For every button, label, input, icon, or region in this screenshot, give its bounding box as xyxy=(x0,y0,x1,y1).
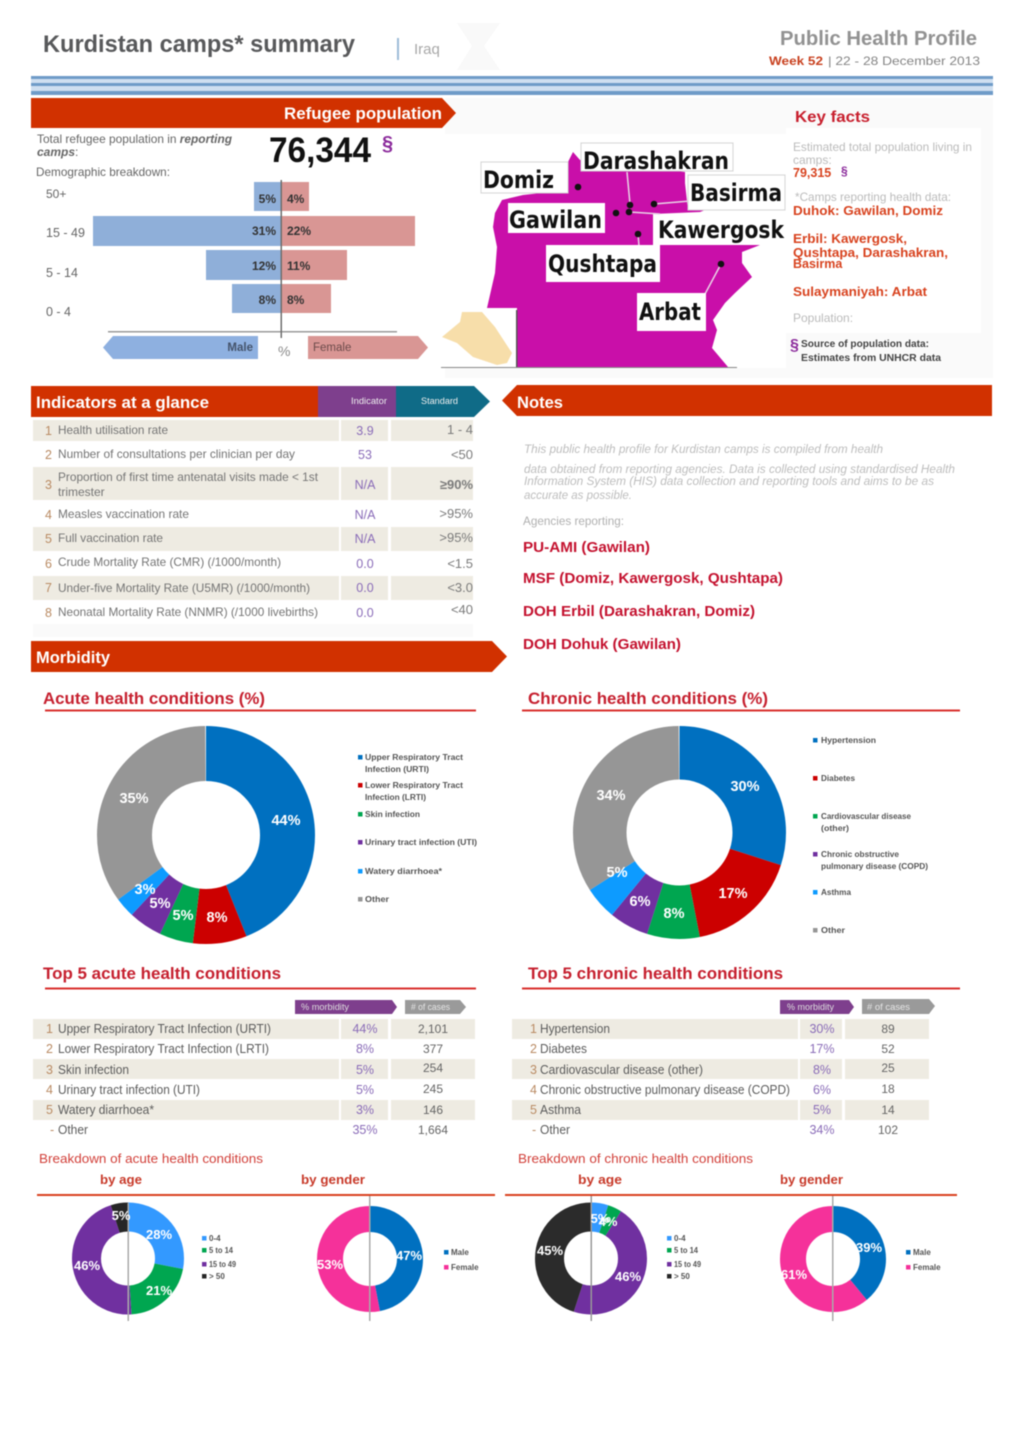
legend: Chronic obstructive xyxy=(821,850,900,859)
indicator row 6: Crude Mortality Rate (CMR) (/1000/month) xyxy=(58,555,281,569)
total population label xyxy=(36,132,233,179)
indicator row 5: N/A xyxy=(355,532,376,546)
legend: Hypertension xyxy=(821,736,876,745)
breakdown headings xyxy=(37,1151,495,1196)
indicators header: Indicator xyxy=(351,396,387,406)
arrow: female legend: Female xyxy=(313,342,351,354)
legend: Upper Respiratory Tract xyxy=(365,753,463,762)
indicator row 8 xyxy=(45,602,473,620)
profile title: Public Health Profile xyxy=(780,28,977,50)
legend: acute by gender xyxy=(444,1248,479,1272)
notes body text: Agencies reporting: xyxy=(523,514,624,528)
label: Kawergosk: Kawergosk xyxy=(658,216,785,244)
source note: § xyxy=(790,337,799,354)
indicator row 3: ≥90% xyxy=(440,477,473,492)
population pyramid chart: 0 - 4 xyxy=(46,305,71,319)
table rows: Skin infection xyxy=(58,1063,129,1077)
table rows: Lower Respiratory Tract Infection (LRTI) xyxy=(58,1042,269,1056)
legend: Infection (LRTI) xyxy=(365,793,426,802)
donut chart xyxy=(124,754,288,916)
banner: morbidity xyxy=(31,641,507,672)
donut value labels: 5% xyxy=(150,896,171,912)
indicator row 8: 8 xyxy=(45,606,52,620)
legend: pulmonary disease (COPD) xyxy=(821,862,928,871)
indicators header xyxy=(31,386,490,417)
indicator row 7: Under-five Mortality Rate (U5MR) (/1000/month) xyxy=(58,581,310,595)
week and dates: | 22 - 28 December 2013 xyxy=(828,54,980,68)
inset map of Iraq xyxy=(441,310,737,368)
faint logo mark xyxy=(457,23,500,70)
notes body text: data obtained from reporting agencies. Data is collected using standardised Health xyxy=(524,464,955,476)
label: Gawilan: Gawilan xyxy=(509,206,602,234)
donut value labels: 5% xyxy=(173,908,194,924)
week and dates xyxy=(769,54,980,68)
panel: indicators at a glance xyxy=(31,386,490,637)
total population label: Demographic breakdown: xyxy=(36,165,170,179)
key facts heading: Key facts xyxy=(795,109,870,126)
population pyramid chart: 5 - 14 xyxy=(46,266,78,280)
table rows: 8% xyxy=(356,1042,374,1056)
indicators header: Standard xyxy=(421,396,458,406)
estimated population xyxy=(793,140,972,180)
table rows: 5% xyxy=(356,1063,374,1077)
indicator row 3: N/A xyxy=(355,478,376,492)
table rows: 102 xyxy=(878,1123,898,1137)
panel: key facts xyxy=(786,109,981,364)
table rows: 2,101 xyxy=(418,1022,448,1036)
legend: acute by age xyxy=(202,1234,236,1281)
panel: breakdown of acute health conditions xyxy=(37,1151,495,1321)
agencies reporting list: DOH Erbil (Darashakran, Domiz) xyxy=(523,604,755,620)
source note xyxy=(790,337,941,364)
population pyramid chart: 22% xyxy=(287,224,311,238)
camps reporting: *Camps reporting health data: xyxy=(795,190,951,204)
map region xyxy=(487,152,760,367)
indicator row 7: 7 xyxy=(45,581,52,595)
column tags: # of cases xyxy=(867,1002,911,1012)
table rows: 5 xyxy=(530,1103,537,1117)
donut value labels xyxy=(119,791,301,926)
breakdown headings: by age xyxy=(578,1172,622,1187)
donut chart: chronic by age: 4% xyxy=(599,1214,618,1229)
estimated population: 79,315 xyxy=(793,166,831,180)
population pyramid chart: 8% xyxy=(259,293,276,307)
label: Domiz: Domiz xyxy=(483,166,554,194)
legend: chronic by gender: Female xyxy=(913,1263,941,1272)
banner: refugee population: Refugee population xyxy=(284,104,442,123)
camps reporting: Duhok: Gawilan, Domiz xyxy=(793,204,943,218)
camps reporting: Population: xyxy=(793,311,853,325)
donut chart: acute by age: 28% xyxy=(146,1227,172,1242)
population pyramid chart: 5% xyxy=(259,192,276,206)
banner: morbidity: Morbidity xyxy=(36,648,111,667)
donut chart: acute by gender xyxy=(317,1196,422,1321)
percent axis label: % xyxy=(278,343,290,359)
donut chart: acute by age: 21% xyxy=(146,1283,172,1298)
legend: Infection (URTI) xyxy=(365,765,429,774)
legend: Asthma xyxy=(821,888,852,897)
panel: refugee population xyxy=(31,98,456,359)
legend: Other xyxy=(821,926,845,935)
donut chart xyxy=(600,753,759,912)
label: Basirma xyxy=(688,175,785,210)
table rows: 5 xyxy=(46,1103,53,1117)
donut value labels: 8% xyxy=(207,910,228,926)
legend: Lower Respiratory Tract xyxy=(365,781,463,790)
indicator row 1: Health utilisation rate xyxy=(58,423,168,437)
indicator row 4: Measles vaccination rate xyxy=(58,507,189,521)
table rows: 146 xyxy=(423,1103,443,1117)
panel: notes xyxy=(502,385,992,653)
legend: chronic by age xyxy=(667,1234,701,1281)
country label: Iraq xyxy=(414,41,440,58)
donut chart: chronic by gender: 39% xyxy=(856,1240,882,1255)
breakdown headings: Breakdown of chronic health conditions xyxy=(518,1151,754,1166)
indicator row 4: N/A xyxy=(355,508,376,522)
donut chart: acute by gender: 47% xyxy=(396,1248,422,1263)
table rows xyxy=(46,1022,448,1137)
table rows: 3 xyxy=(530,1063,537,1077)
table rows: 5% xyxy=(813,1103,831,1117)
arrow: female legend xyxy=(308,336,428,359)
indicator row 3: Proportion of first time antenatal visits made < 1st xyxy=(58,470,319,484)
indicator row 7 xyxy=(45,580,473,595)
population pyramid chart: 12% xyxy=(252,259,276,273)
donut chart: chronic by age xyxy=(537,1196,641,1321)
legend: chronic by gender: Male xyxy=(913,1248,931,1257)
column tags xyxy=(780,999,935,1014)
legend xyxy=(358,753,477,904)
table rows: - xyxy=(50,1123,54,1137)
indicator row 5 xyxy=(45,530,473,546)
indicator row 2: <50 xyxy=(451,447,473,462)
heading: Chronic health conditions (%) xyxy=(528,689,768,708)
source note: Estimates from UNHCR data xyxy=(801,353,941,364)
label: Qushtapa: Qushtapa xyxy=(548,250,657,278)
indicator row 2: 2 xyxy=(45,448,52,462)
indicator row 1: 3.9 xyxy=(356,424,374,438)
panel: breakdown of chronic health conditions xyxy=(505,1151,957,1321)
breakdown headings: by gender xyxy=(301,1172,365,1187)
table rows: 8% xyxy=(813,1063,831,1077)
agencies reporting list: PU-AMI (Gawilan) xyxy=(523,540,650,556)
label: Arbat: Arbat xyxy=(639,298,701,326)
table rows: Other xyxy=(58,1123,88,1137)
table rows: Diabetes xyxy=(540,1042,587,1056)
label: Darashakran: Darashakran xyxy=(583,147,729,175)
table rows: 377 xyxy=(423,1042,443,1056)
table rows: 4 xyxy=(530,1083,537,1097)
indicator row 5: Full vaccination rate xyxy=(58,531,163,545)
indicator row 5: 5 xyxy=(45,532,52,546)
label: Basirma: Basirma xyxy=(690,179,782,207)
camps reporting xyxy=(793,190,951,325)
map of camps xyxy=(441,143,787,368)
legend: acute by age: > 50 xyxy=(209,1272,225,1281)
table rows: 3 xyxy=(46,1063,53,1077)
indicator row 2: 53 xyxy=(358,448,372,462)
indicator row 6: <1.5 xyxy=(447,556,473,571)
heading: Top 5 acute health conditions xyxy=(43,964,281,983)
breakdown headings: Breakdown of acute health conditions xyxy=(39,1151,264,1166)
table rows: 25 xyxy=(881,1061,895,1075)
legend: acute by gender: Female xyxy=(451,1263,479,1272)
legend: Cardiovascular disease xyxy=(821,812,912,821)
table rows: 17% xyxy=(809,1042,835,1056)
table rows xyxy=(530,1022,898,1137)
title: Kurdistan camps* summary xyxy=(43,31,356,58)
indicator row 4: 4 xyxy=(45,508,52,522)
column tags: # of cases xyxy=(411,1002,450,1012)
table rows: 14 xyxy=(881,1103,895,1117)
heading: Acute health conditions (%) xyxy=(43,689,265,708)
donut value labels: 8% xyxy=(664,906,685,922)
donut value labels: 30% xyxy=(730,779,760,795)
population pyramid chart: 11% xyxy=(287,259,311,273)
notes banner xyxy=(502,385,992,416)
panel: top 5 chronic health conditions xyxy=(512,964,960,1137)
legend: Watery diarrhoea* xyxy=(365,867,443,876)
table rows: 4 xyxy=(46,1083,53,1097)
legend: chronic by age: 5 to 14 xyxy=(674,1246,699,1255)
donut chart: chronic by age: 5% xyxy=(591,1211,610,1226)
panel: top 5 acute health conditions xyxy=(33,964,476,1137)
table rows: 89 xyxy=(881,1022,895,1036)
donut value labels: 17% xyxy=(718,886,748,902)
indicator row 8: <40 xyxy=(451,602,473,617)
indicator row 3: 3 xyxy=(45,478,52,492)
table rows: 44% xyxy=(352,1022,378,1036)
donut chart: chronic by age: 46% xyxy=(615,1269,641,1284)
camps reporting: Basirma xyxy=(793,257,843,271)
population pyramid chart xyxy=(46,180,415,338)
label: Qushtapa xyxy=(546,245,660,282)
table rows: 30% xyxy=(809,1022,835,1036)
estimated population: Estimated total population living in xyxy=(793,140,972,154)
camps reporting: Qushtapa, Darashakran, xyxy=(793,246,948,260)
table rows: Other xyxy=(540,1123,570,1137)
indicator row 3: trimester xyxy=(58,485,105,499)
donut chart: chronic by age: 45% xyxy=(537,1243,563,1258)
label: Arbat xyxy=(637,293,706,331)
donut value labels xyxy=(596,779,760,922)
agencies reporting list: DOH Dohuk (Gawilan) xyxy=(523,637,681,653)
indicator row 2 xyxy=(45,447,473,462)
donut value labels: 34% xyxy=(596,788,626,804)
donut value labels: 44% xyxy=(271,813,301,829)
legend: acute by age: 15 to 49 xyxy=(209,1260,236,1269)
population pyramid chart: 15 - 49 xyxy=(46,226,85,240)
indicator row 1: 1 - 4 xyxy=(447,422,473,437)
indicator row 6 xyxy=(45,555,473,571)
indicator row 5: >95% xyxy=(439,530,473,545)
legend: chronic by gender xyxy=(906,1248,941,1272)
column tags: % morbidity xyxy=(787,1002,834,1012)
table rows: 35% xyxy=(352,1123,378,1137)
indicator row 6: 0.0 xyxy=(356,557,374,571)
population pyramid chart: 8% xyxy=(287,293,305,307)
donut chart: acute by age: 5% xyxy=(112,1208,131,1223)
donut value labels: 5% xyxy=(607,865,628,881)
legend: Other xyxy=(365,895,389,904)
indicator row 1: 1 xyxy=(45,424,52,438)
breakdown headings: by gender xyxy=(780,1172,843,1187)
legend: (other) xyxy=(821,824,849,833)
table rows: 18 xyxy=(881,1082,895,1096)
column tags xyxy=(295,1000,466,1014)
table rows: Watery diarrhoea* xyxy=(58,1103,154,1117)
legend: Diabetes xyxy=(821,774,856,783)
indicator row 2: Number of consultations per clinician per day xyxy=(58,447,295,461)
indicator row 1 xyxy=(45,422,473,438)
table rows: 2 xyxy=(530,1042,537,1056)
indicator row 4: >95% xyxy=(439,506,473,521)
column tags: % morbidity xyxy=(301,1002,350,1012)
indicator row 7: 0.0 xyxy=(356,581,374,595)
total population label: camps: xyxy=(37,145,78,159)
notes body text: This public health profile for Kurdistan camps is compiled from health xyxy=(524,444,883,456)
indicator row 6: 6 xyxy=(45,557,52,571)
camp location dots xyxy=(575,184,724,267)
total population label: Total refugee population in reporting xyxy=(37,132,233,146)
indicator row 7: <3.0 xyxy=(447,580,473,595)
table rows: Upper Respiratory Tract Infection (URTI) xyxy=(58,1022,271,1036)
heading: Top 5 chronic health conditions xyxy=(528,964,783,983)
page header xyxy=(43,23,980,70)
table rows: Hypertension xyxy=(540,1022,610,1036)
indicator row 3 xyxy=(45,470,473,499)
table rows: 1 xyxy=(530,1022,537,1036)
estimated population: camps: xyxy=(793,153,832,167)
breakdown headings xyxy=(505,1151,957,1196)
country label xyxy=(397,38,440,60)
table rows: - xyxy=(532,1123,536,1137)
table rows: 52 xyxy=(881,1042,895,1056)
indicators header: Indicators at a glance xyxy=(36,393,209,412)
source note: Source of population data: xyxy=(801,339,929,350)
legend: chronic by age: 0-4 xyxy=(674,1234,686,1243)
panel: acute health conditions xyxy=(43,689,477,926)
notes body text: accurate as possible. xyxy=(524,490,632,502)
camps reporting: Sulaymaniyah: Arbat xyxy=(793,285,928,299)
arrow: male legend: Male xyxy=(227,342,253,354)
camps reporting: Erbil: Kawergosk, xyxy=(793,232,907,246)
table rows: 245 xyxy=(423,1082,443,1096)
indicator row 4 xyxy=(45,506,473,522)
indicator row 8: 0.0 xyxy=(356,606,374,620)
donut chart: acute by age xyxy=(74,1203,172,1321)
donut chart: acute by age: 46% xyxy=(74,1258,100,1273)
population pyramid chart: 31% xyxy=(252,224,276,238)
table rows: Chronic obstructive pulmonary disease (COPD) xyxy=(540,1083,790,1097)
week and dates: Week 52 xyxy=(769,54,823,68)
legend: Skin infection xyxy=(365,810,420,819)
donut chart: chronic by gender xyxy=(781,1196,882,1321)
legend: acute by gender: Male xyxy=(451,1248,469,1257)
agencies reporting list xyxy=(523,540,783,653)
donut value labels: 6% xyxy=(630,894,651,910)
table rows: 6% xyxy=(813,1083,831,1097)
donut chart: acute by gender: 53% xyxy=(317,1257,343,1272)
notes banner: Notes xyxy=(517,393,563,412)
breakdown headings: by age xyxy=(100,1172,142,1187)
agencies reporting list: MSF (Domiz, Kawergosk, Qushtapa) xyxy=(523,571,783,587)
table rows: 1,664 xyxy=(418,1123,448,1137)
legend: acute by age: 0-4 xyxy=(209,1234,221,1243)
donut chart: chronic by gender: 61% xyxy=(781,1267,807,1282)
total population number: 76,344 xyxy=(269,131,371,170)
table rows: 2 xyxy=(46,1042,53,1056)
table rows: Asthma xyxy=(540,1103,581,1117)
notes body text: Information System (HIS) data collection and reporting tools and aims to be as xyxy=(524,476,934,488)
donut value labels: 3% xyxy=(135,882,156,898)
banner: refugee population xyxy=(31,98,456,128)
indicator row 8: Neonatal Mortality Rate (NNMR) (/1000 livebirths) xyxy=(58,605,318,619)
legend: Urinary tract infection (UTI) xyxy=(365,838,477,847)
total population number: § xyxy=(382,133,393,155)
legend: chronic by age: > 50 xyxy=(674,1272,690,1281)
table rows: 1 xyxy=(46,1022,53,1036)
arrow: male legend xyxy=(103,336,258,359)
table rows: Urinary tract infection (UTI) xyxy=(58,1083,200,1097)
table rows: 3% xyxy=(356,1103,374,1117)
table rows: 254 xyxy=(423,1061,443,1075)
estimated population: § xyxy=(841,164,848,178)
population pyramid chart: 4% xyxy=(287,192,305,206)
population pyramid chart: 50+ xyxy=(46,187,66,201)
notes body text xyxy=(523,444,955,528)
panel: chronic health conditions xyxy=(522,689,960,935)
donut value labels: 35% xyxy=(119,791,149,807)
legend xyxy=(813,736,928,935)
table rows: 34% xyxy=(809,1123,835,1137)
legend: acute by age: 5 to 14 xyxy=(209,1246,234,1255)
table rows: 5% xyxy=(356,1083,374,1097)
legend: chronic by age: 15 to 49 xyxy=(674,1260,701,1269)
table rows: Cardiovascular disease (other) xyxy=(540,1063,703,1077)
